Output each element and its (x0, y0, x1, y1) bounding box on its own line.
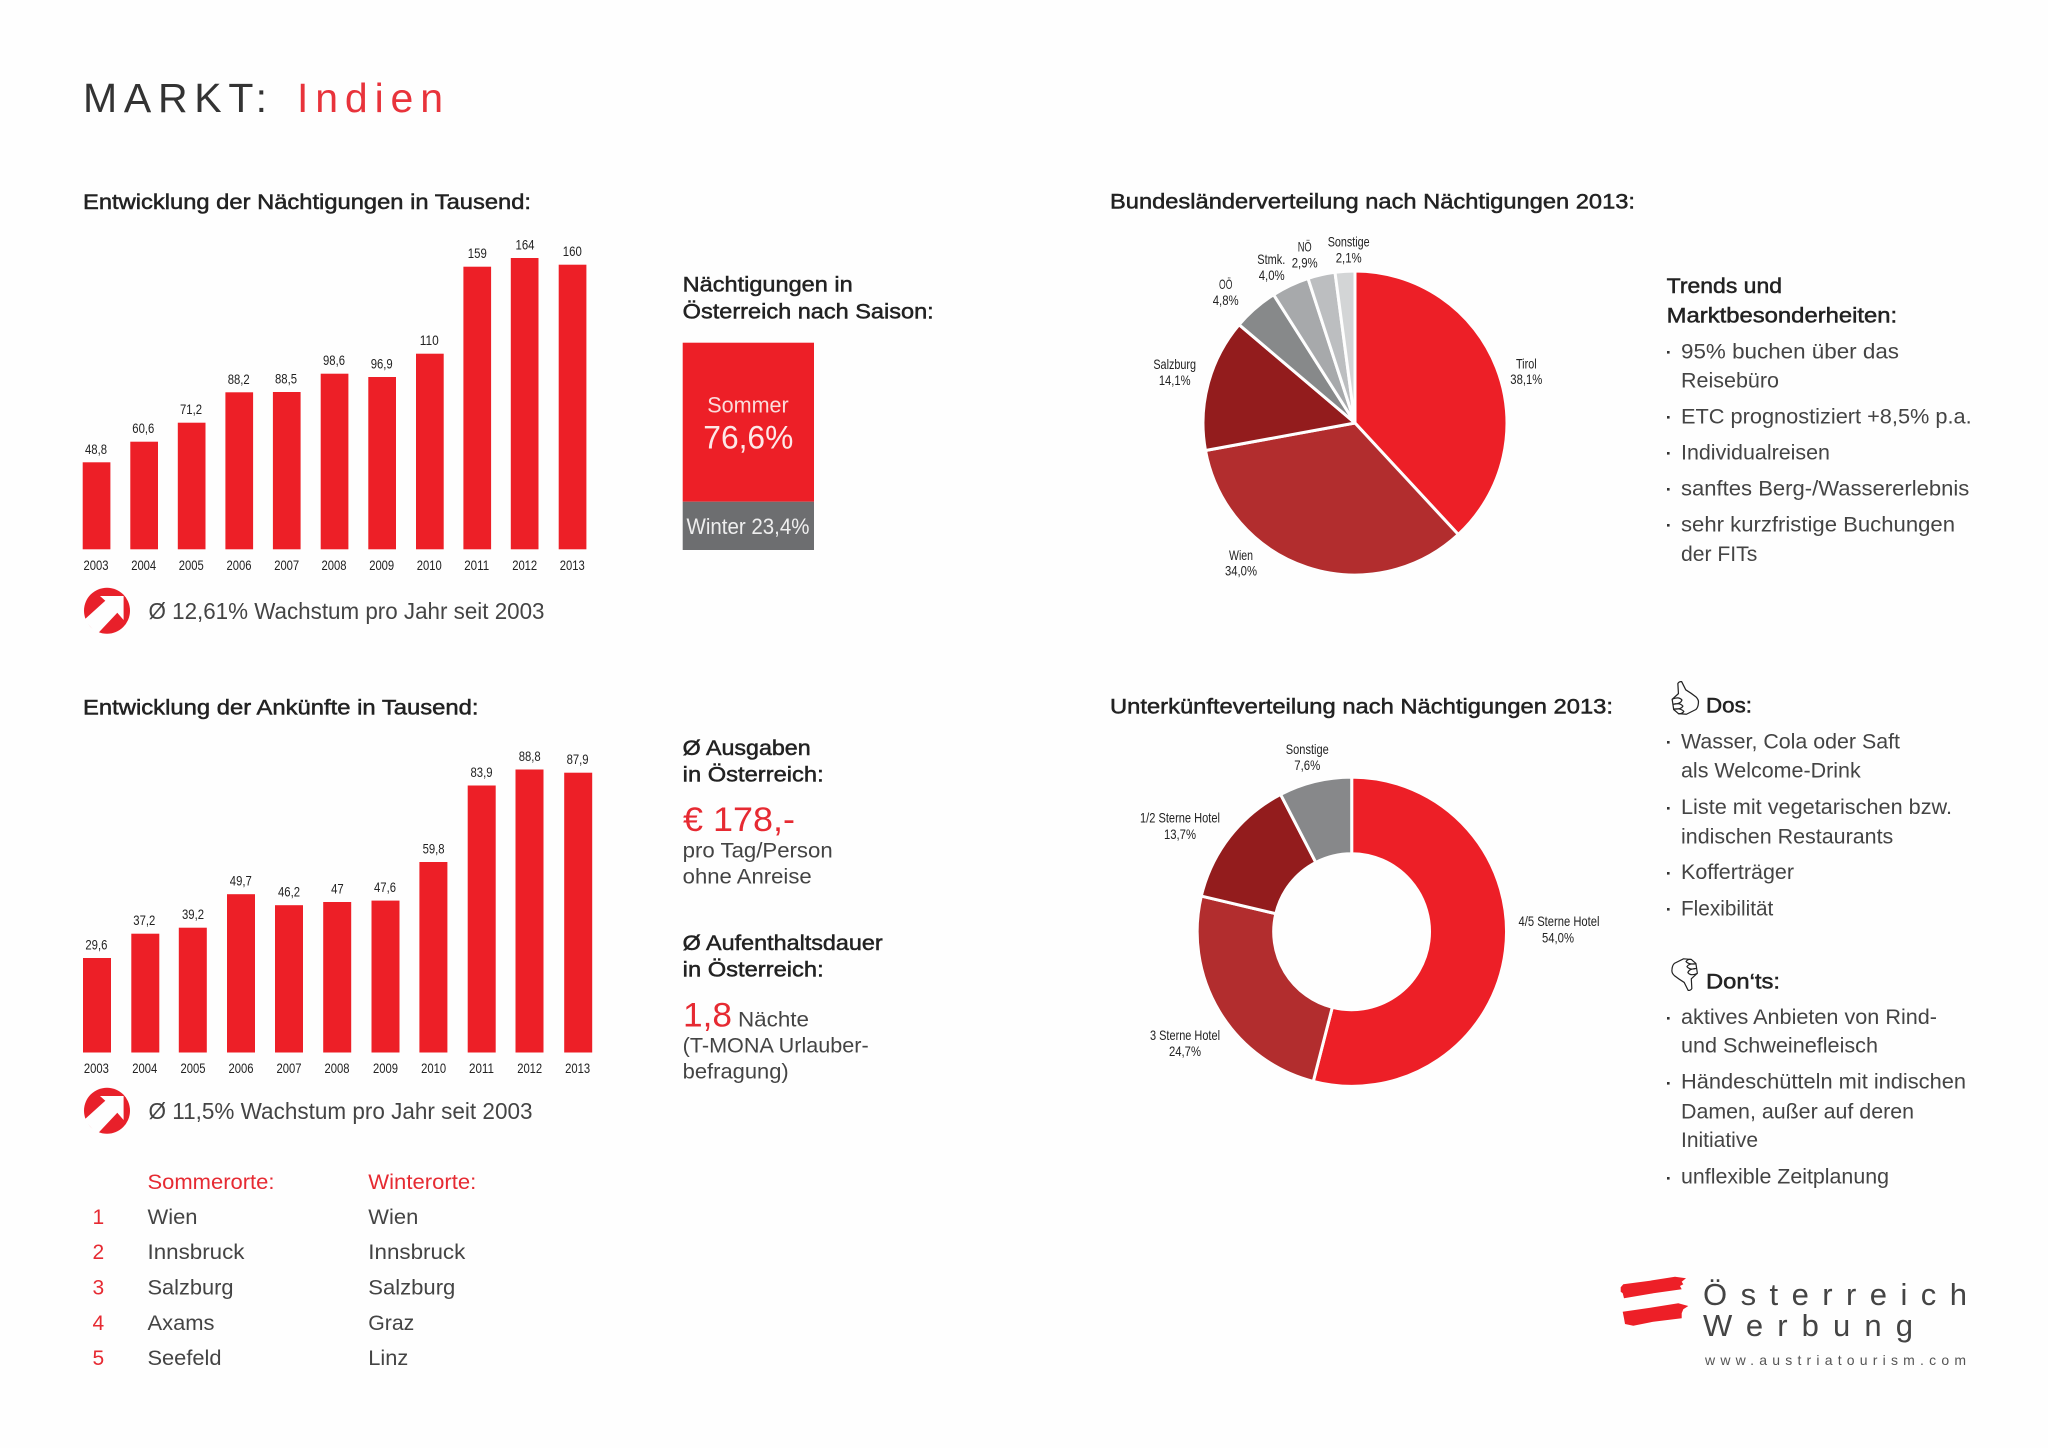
panel: trends (1667, 274, 1972, 566)
spending note: ohne Anreise (683, 865, 812, 888)
column headings: Sommerorte: (148, 1171, 274, 1194)
bullet list: donts: Händeschütteln mit indischen (1681, 1071, 1966, 1094)
panel: accommodation donut (1110, 694, 1613, 1086)
summer destinations: Innsbruck (148, 1241, 245, 1264)
value labels: overnight stays: 71,2 (180, 401, 202, 417)
heading: spending: in Österreich: (683, 763, 824, 787)
year labels: arrivals: 2012 (517, 1060, 542, 1076)
bullet list: dos: als Welcome-Drink (1681, 760, 1861, 783)
heading: spending: Ø Ausgaben (683, 736, 811, 760)
value labels: overnight stays: 110 (420, 332, 439, 348)
bullet list: dos: Liste mit vegetarischen bzw. (1681, 796, 1952, 819)
donut labels (1140, 741, 1600, 1059)
rank numbers: 5 (92, 1347, 104, 1370)
bullet list: donts: Initiative (1681, 1129, 1758, 1152)
pie labels: states: NÖ (1298, 238, 1312, 255)
heading: season (683, 273, 934, 323)
year labels: overnight stays: 2007 (274, 557, 299, 573)
icon: growth arrow (84, 588, 130, 634)
bullet list: donts: aktives Anbieten von Rind- (1681, 1006, 1937, 1029)
pie labels: states: 2,9% (1292, 254, 1318, 270)
value labels: overnight stays: 88,2 (228, 371, 250, 387)
heading: stay (683, 931, 883, 982)
title: MARKT: (83, 75, 267, 121)
heading: trends: Marktbesonderheiten: (1667, 303, 1897, 327)
rank numbers (92, 1206, 104, 1370)
value labels: arrivals: 47,6 (374, 879, 396, 895)
winter destinations: Salzburg (368, 1276, 455, 1300)
bullet list: donts: und Schweinefleisch (1681, 1035, 1878, 1058)
donut chart: accommodation (1197, 777, 1507, 1086)
rank numbers: 1 (92, 1206, 104, 1229)
rank numbers: 3 (92, 1276, 104, 1300)
panel: dos (1667, 682, 1952, 920)
logo wordmark: www.austriatourism.com (1704, 1352, 1966, 1368)
value labels: arrivals: 83,9 (470, 764, 493, 780)
bars: arrivals (83, 770, 592, 1052)
year labels: arrivals: 2011 (469, 1060, 494, 1076)
value labels: overnight stays (85, 236, 582, 457)
year labels: overnight stays: 2009 (369, 557, 394, 573)
donut labels: 54,0% (1542, 929, 1574, 945)
year labels: arrivals: 2004 (132, 1060, 157, 1076)
bullet list: trends: 95% buchen über das (1681, 340, 1899, 363)
donut labels: Sonstige (1286, 741, 1329, 757)
year labels: arrivals (84, 1060, 590, 1076)
year labels: arrivals: 2003 (84, 1060, 109, 1076)
pie labels: states: Tirol (1516, 355, 1537, 371)
summer destinations (148, 1206, 245, 1370)
value labels: arrivals: 49,7 (230, 873, 252, 889)
bullet list: trends (1667, 340, 1972, 566)
winter destinations: Wien (368, 1206, 418, 1229)
panel: overnight stays bar chart (83, 190, 586, 634)
summer destinations: Salzburg (148, 1276, 234, 1300)
year labels: overnight stays (84, 557, 585, 573)
value labels: arrivals: 39,2 (182, 906, 204, 922)
year labels: overnight stays: 2004 (131, 557, 156, 573)
spending value: € 178,- (683, 801, 795, 839)
panel: top destinations table (92, 1171, 476, 1370)
donut labels: 13,7% (1164, 826, 1196, 842)
winter destinations: Linz (368, 1347, 408, 1370)
winter destinations (368, 1206, 466, 1370)
bullet list: trends: der FITs (1681, 543, 1757, 566)
year labels: overnight stays: 2006 (226, 557, 252, 573)
year labels: overnight stays: 2008 (322, 557, 347, 573)
pie labels: states: 4,8% (1213, 292, 1239, 308)
column headings: Winterorte: (368, 1171, 476, 1194)
panel: arrivals bar chart (83, 695, 592, 1134)
panel: length of stay (683, 931, 883, 1083)
logo: Österreich Werbung (1621, 1277, 1967, 1368)
donut labels: 7,6% (1294, 757, 1320, 773)
bullet list: trends: sanftes Berg-/Wassererlebnis (1681, 477, 1969, 500)
growth text: arrivals: Ø 11,5% Wachstum pro Jahr seit 2003 (148, 1098, 532, 1124)
pie labels: states: Stmk. (1257, 251, 1285, 267)
bullet list: dos: indischen Restaurants (1681, 825, 1893, 848)
pie labels: states (1153, 234, 1542, 579)
summer destinations: Axams (148, 1312, 214, 1335)
stay value (683, 997, 809, 1035)
year labels: arrivals: 2008 (324, 1060, 350, 1076)
rank numbers: 4 (92, 1312, 104, 1335)
summer block (683, 343, 814, 502)
pie labels: states: Sonstige (1328, 234, 1370, 250)
heading: stay: Ø Aufenthaltsdauer (683, 931, 883, 955)
icon: growth arrow (84, 1088, 130, 1134)
heading: season: Österreich nach Saison: (683, 299, 934, 323)
year labels: overnight stays: 2003 (84, 557, 109, 573)
bullet list: donts: Damen, außer auf deren (1681, 1100, 1914, 1123)
donut labels: 24,7% (1169, 1043, 1201, 1059)
year labels: overnight stays: 2010 (417, 557, 442, 573)
value labels: arrivals: 47 (331, 880, 344, 896)
pie labels: states: OÖ (1219, 275, 1232, 292)
value labels: arrivals: 88,8 (519, 748, 541, 764)
pie labels: states: 34,0% (1225, 563, 1257, 579)
bullet list: dos: Flexibilität (1681, 897, 1773, 920)
panel: state distribution pie (1110, 190, 1635, 579)
heading: season: Nächtigungen in (683, 273, 853, 297)
value labels: overnight stays: 98,6 (323, 352, 345, 368)
pie labels: states: 14,1% (1159, 372, 1191, 388)
year labels: arrivals: 2006 (228, 1060, 254, 1076)
year labels: arrivals: 2010 (421, 1060, 446, 1076)
pie chart: states (1203, 271, 1507, 575)
title (83, 75, 443, 121)
pie labels: states: Salzburg (1153, 356, 1196, 372)
stay note: (T-MONA Urlauber- (683, 1035, 869, 1058)
heading: spending (683, 736, 824, 787)
icon: austrian flag stripes (1621, 1277, 1688, 1326)
winter block (683, 502, 814, 550)
winter destinations: Graz (368, 1312, 414, 1335)
winter block: Winter 23,4% (686, 514, 810, 539)
value labels: arrivals (85, 748, 589, 952)
icon: thumbs down (1672, 959, 1697, 990)
year labels: arrivals: 2005 (180, 1060, 206, 1076)
donut labels: 4/5 Sterne Hotel (1518, 913, 1600, 929)
growth text: overnight stays: Ø 12,61% Wachstum pro Jahr seit 2003 (148, 598, 544, 624)
bullet list: dos (1667, 731, 1952, 920)
bullet list: donts (1667, 1006, 1966, 1189)
value labels: arrivals: 29,6 (85, 936, 108, 952)
value labels: overnight stays: 60,6 (132, 420, 154, 436)
value labels: arrivals: 46,2 (278, 884, 300, 900)
winter destinations: Innsbruck (368, 1241, 466, 1264)
bullet list: trends: sehr kurzfristige Buchungen (1681, 514, 1955, 537)
value labels: arrivals: 59,8 (423, 840, 445, 856)
value labels: overnight stays: 88,5 (275, 370, 297, 386)
panel: average spending (683, 736, 833, 888)
bullet list: dos: Wasser, Cola oder Saft (1681, 731, 1900, 754)
pie labels: states: 2,1% (1336, 249, 1362, 265)
value labels: arrivals: 87,9 (567, 751, 589, 767)
value labels: overnight stays: 159 (468, 245, 487, 261)
bullet list: dos: Kofferträger (1681, 861, 1794, 884)
year labels: arrivals: 2009 (373, 1060, 398, 1076)
heading: state distribution: Bundesländerverteilung nach Nächtigungen 2013: (1110, 190, 1635, 214)
icon: thumbs up (1672, 682, 1699, 714)
stay note: befragung) (683, 1060, 789, 1083)
year labels: overnight stays: 2005 (179, 557, 204, 573)
logo wordmark: Österreich (1703, 1277, 1967, 1312)
value labels: overnight stays: 164 (516, 236, 535, 252)
heading: dos: Dos: (1706, 694, 1752, 718)
heading: trends: Trends und (1667, 274, 1782, 298)
heading: stay: in Österreich: (683, 958, 824, 982)
value labels: overnight stays: 96,9 (371, 356, 393, 372)
logo wordmark: Werbung (1703, 1308, 1913, 1343)
pie labels: states: 4,0% (1259, 267, 1285, 283)
panel: season split (683, 273, 934, 550)
heading: overnight stays: Entwicklung der Nächtigungen in Tausend: (83, 190, 531, 214)
value labels: overnight stays: 48,8 (85, 441, 107, 457)
year labels: arrivals: 2013 (565, 1060, 590, 1076)
year labels: overnight stays: 2012 (512, 557, 537, 573)
year labels: overnight stays: 2011 (464, 557, 489, 573)
logo wordmark (1703, 1277, 1967, 1368)
spending note (683, 839, 833, 888)
summer destinations: Wien (148, 1206, 198, 1229)
spending note: pro Tag/Person (683, 839, 833, 862)
summer destinations: Seefeld (148, 1347, 222, 1370)
year labels: overnight stays: 2013 (560, 557, 585, 573)
stay note (683, 1035, 869, 1083)
stay value: Nächte (738, 1009, 809, 1032)
heading: trends (1667, 274, 1897, 327)
donut labels: 3 Sterne Hotel (1150, 1027, 1220, 1043)
year labels: arrivals: 2007 (276, 1060, 302, 1076)
heading: accommodation: Unterkünfteverteilung nach Nächtigungen 2013: (1110, 694, 1613, 718)
pie labels: states: 38,1% (1510, 371, 1542, 387)
bars: overnight stays (83, 258, 586, 549)
pie labels: states: Wien (1229, 547, 1253, 563)
bullet list: donts: unflexible Zeitplanung (1681, 1166, 1889, 1189)
rank numbers: 2 (92, 1241, 104, 1264)
value labels: overnight stays: 160 (563, 243, 582, 259)
value labels: arrivals: 37,2 (133, 912, 155, 928)
heading: donts: Don‘ts: (1706, 970, 1780, 994)
heading: arrivals: Entwicklung der Ankünfte in Tausend: (83, 695, 479, 719)
panel: donts (1667, 959, 1966, 1189)
column headings (148, 1171, 476, 1194)
title: Indien (297, 75, 443, 121)
bullet list: trends: ETC prognostiziert +8,5% p.a. (1681, 405, 1972, 428)
summer block: Sommer (707, 393, 789, 418)
bullet list: trends: Individualreisen (1681, 441, 1830, 464)
donut labels: 1/2 Sterne Hotel (1140, 810, 1220, 826)
stay value: 1,8 (683, 997, 732, 1035)
bullet list: trends: Reisebüro (1681, 370, 1779, 393)
summer block: 76,6% (703, 419, 793, 455)
